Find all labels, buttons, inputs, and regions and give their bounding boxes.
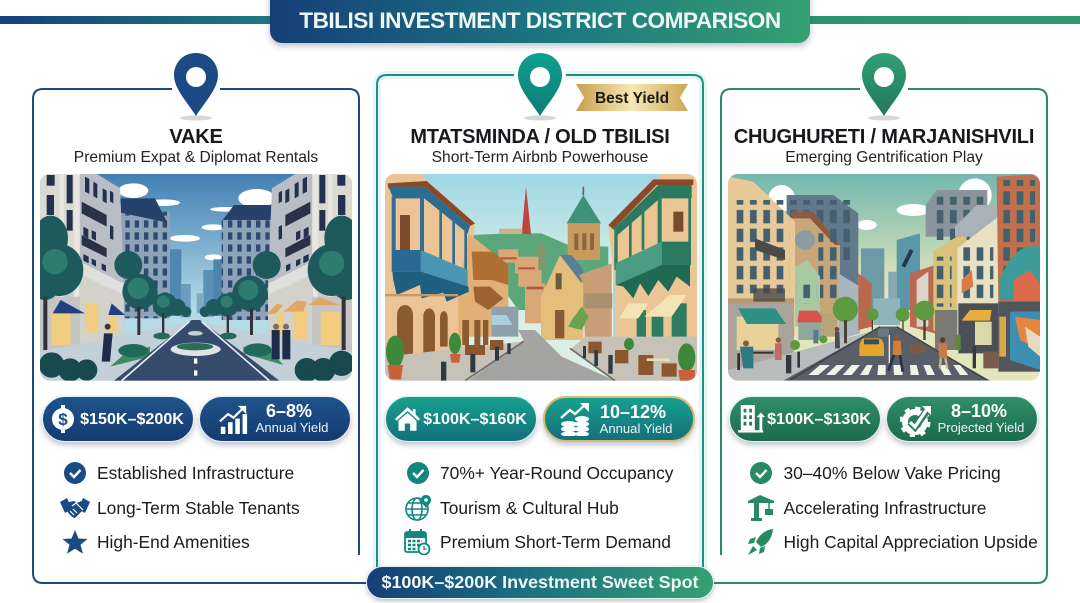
callout: investment sweet spot: $100K–$200K Investment Sweet Spot (381, 572, 699, 592)
bullet: occupancy (407, 462, 674, 484)
icon: crane (748, 495, 774, 521)
icon: dollar coin (52, 405, 74, 433)
illustration: Vake boulevard (40, 174, 352, 381)
bullet: infrastructure (64, 462, 294, 484)
bullet: demand (404, 529, 671, 555)
yield label: Annual Yield (256, 420, 328, 435)
icon: check (407, 462, 429, 484)
icon: growth arrow with coins (560, 403, 589, 436)
panel border (714, 88, 1048, 584)
district name: MTATSMINDA / OLD TBILISI (410, 126, 670, 148)
price range: $100K–$130K (767, 410, 871, 428)
left house wall is part of this illustration (385, 174, 518, 363)
title (270, 0, 810, 43)
bullet: tenants (60, 498, 300, 518)
bullet text: Long-Term Stable Tenants (97, 498, 300, 518)
icon: map pin (862, 53, 906, 120)
badge: best yield ribbon: Best Yield (595, 90, 669, 107)
icon: star (62, 530, 88, 554)
panel: Chughureti / Marjanishvili (714, 53, 1048, 584)
bullet text: Premium Short-Term Demand (440, 532, 671, 552)
icon: map pin (518, 53, 562, 120)
price range: $150K–$200K (80, 410, 184, 428)
yield value: 8–10% (951, 401, 1007, 421)
yield value: 10–12% (600, 402, 666, 422)
bullet text: Established Infrastructure (97, 463, 294, 483)
district subtitle: Short-Term Airbnb Powerhouse (432, 149, 648, 166)
bullet text: Tourism & Cultural Hub (440, 498, 619, 518)
header line: left (0, 16, 272, 24)
icon: gear with check (900, 406, 931, 437)
bullet text: 30–40% Below Vake Pricing (784, 463, 1001, 483)
yield pill (543, 396, 695, 442)
header line: right (808, 16, 1080, 24)
price pill (385, 396, 537, 442)
icon: handshake (60, 498, 90, 518)
yield label: Annual Yield (600, 421, 672, 436)
icon: check (750, 462, 772, 484)
price pill (729, 396, 881, 442)
bullet text: 70%+ Year-Round Occupancy (440, 463, 673, 483)
icon: rocket (748, 529, 773, 555)
price range: $100K–$160K (423, 410, 527, 428)
icon: dollar coin: $ (58, 410, 68, 429)
yield pill (199, 396, 351, 442)
bullet text: Accelerating Infrastructure (784, 498, 986, 518)
bullet: amenities (62, 530, 250, 554)
bullet: infrastructure (748, 495, 986, 521)
icon: building with arrow (738, 405, 765, 433)
panel: Vake (32, 53, 366, 584)
district name: CHUGHURETI / MARJANISHVILI (734, 126, 1034, 148)
district subtitle: Emerging Gentrification Play (785, 149, 983, 166)
badge: best yield ribbon (576, 84, 688, 111)
yield pill (886, 396, 1038, 442)
panel border (32, 88, 366, 584)
icon: calendar with clock (404, 529, 430, 555)
panel border with glow (373, 71, 707, 569)
bullet text: High-End Amenities (97, 532, 250, 552)
icon: map pin (174, 53, 218, 120)
bullet: tourism (405, 495, 619, 521)
yield label: Projected Yield (938, 420, 1024, 435)
bullet: pricing (750, 462, 1001, 484)
district name: VAKE (169, 126, 223, 148)
icon: house (395, 407, 420, 431)
panel: Mtatsminda / Old Tbilisi (373, 53, 707, 569)
bullet text: High Capital Appreciation Upside (784, 532, 1038, 552)
illustration: Old Tbilisi street (385, 174, 697, 381)
illustration: Marjanishvili street (728, 174, 1040, 381)
yield value: 6–8% (266, 401, 312, 421)
price pill (42, 396, 194, 442)
district subtitle: Premium Expat & Diplomat Rentals (74, 149, 318, 166)
callout: investment sweet spot (366, 566, 714, 599)
bullet: appreciation (748, 529, 1038, 555)
icon: globe with pin (405, 495, 431, 521)
icon: rising bars (219, 406, 248, 434)
title: TBILISI INVESTMENT DISTRICT COMPARISON (299, 8, 781, 33)
icon: check (64, 462, 86, 484)
